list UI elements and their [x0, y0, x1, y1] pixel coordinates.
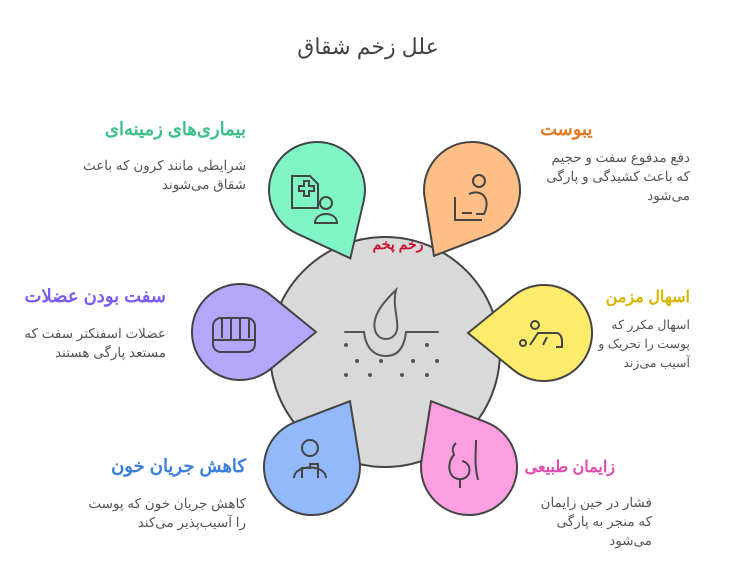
block: chronic diarrhea text: پوست را تحریک و — [598, 337, 690, 351]
petal: purple — [192, 284, 316, 380]
block: tight muscles: عضلات اسفنکتر سفت که — [24, 326, 166, 341]
block: chronic diarrhea heading: اسهال مزمن — [606, 289, 690, 306]
block: chronic diarrhea text: آسیب می‌زند — [623, 356, 690, 370]
block: underlying diseases: شقاق می‌شوند — [162, 177, 246, 192]
block: chronic diarrhea text — [598, 318, 690, 370]
block: underlying diseases — [83, 119, 246, 192]
block: reduced blood flow: را آسیب‌پذیر می‌کند — [138, 515, 246, 530]
block: reduced blood flow: کاهش جریان خون — [111, 456, 246, 476]
watermark: زخم پخم — [373, 236, 424, 253]
block: underlying diseases: شرایطی مانند کرون که باعث — [83, 158, 246, 173]
block: constipation text: که باعث کشیدگی و پارگی — [546, 169, 690, 184]
block: reduced blood flow: کاهش جریان خون که پوست — [88, 496, 246, 511]
block: childbirth heading: زایمان طبیعی — [525, 459, 615, 476]
block: constipation text — [546, 150, 690, 204]
block: childbirth text: که منجر به پارگی — [557, 514, 652, 529]
title: علل زخم شقاق — [297, 34, 439, 59]
block: constipation text: دفع مدفوع سفت و حجیم — [552, 150, 690, 165]
block: childbirth text — [541, 495, 652, 548]
block: constipation text: می‌شود — [647, 188, 690, 203]
block: childbirth text: فشار در حین زایمان — [541, 495, 652, 510]
block: tight muscles — [24, 286, 166, 360]
petal: orange — [392, 124, 538, 280]
petal: pink — [389, 377, 535, 533]
petal: blue — [246, 377, 392, 533]
block: childbirth text: می‌شود — [609, 533, 652, 548]
block: tight muscles: مستعد پارگی هستند — [55, 345, 166, 360]
center circle — [270, 236, 500, 467]
block: constipation heading: یبوست — [540, 119, 592, 139]
block: underlying diseases: بیماری‌های زمینه‌ای — [105, 119, 246, 139]
petal: green — [253, 126, 393, 279]
block: tight muscles: سفت بودن عضلات — [25, 286, 166, 306]
petal: yellow — [468, 285, 592, 381]
icon: skin drop — [344, 290, 439, 377]
block: reduced blood flow — [88, 456, 246, 530]
block: chronic diarrhea text: اسهال مکرر که — [611, 318, 690, 332]
